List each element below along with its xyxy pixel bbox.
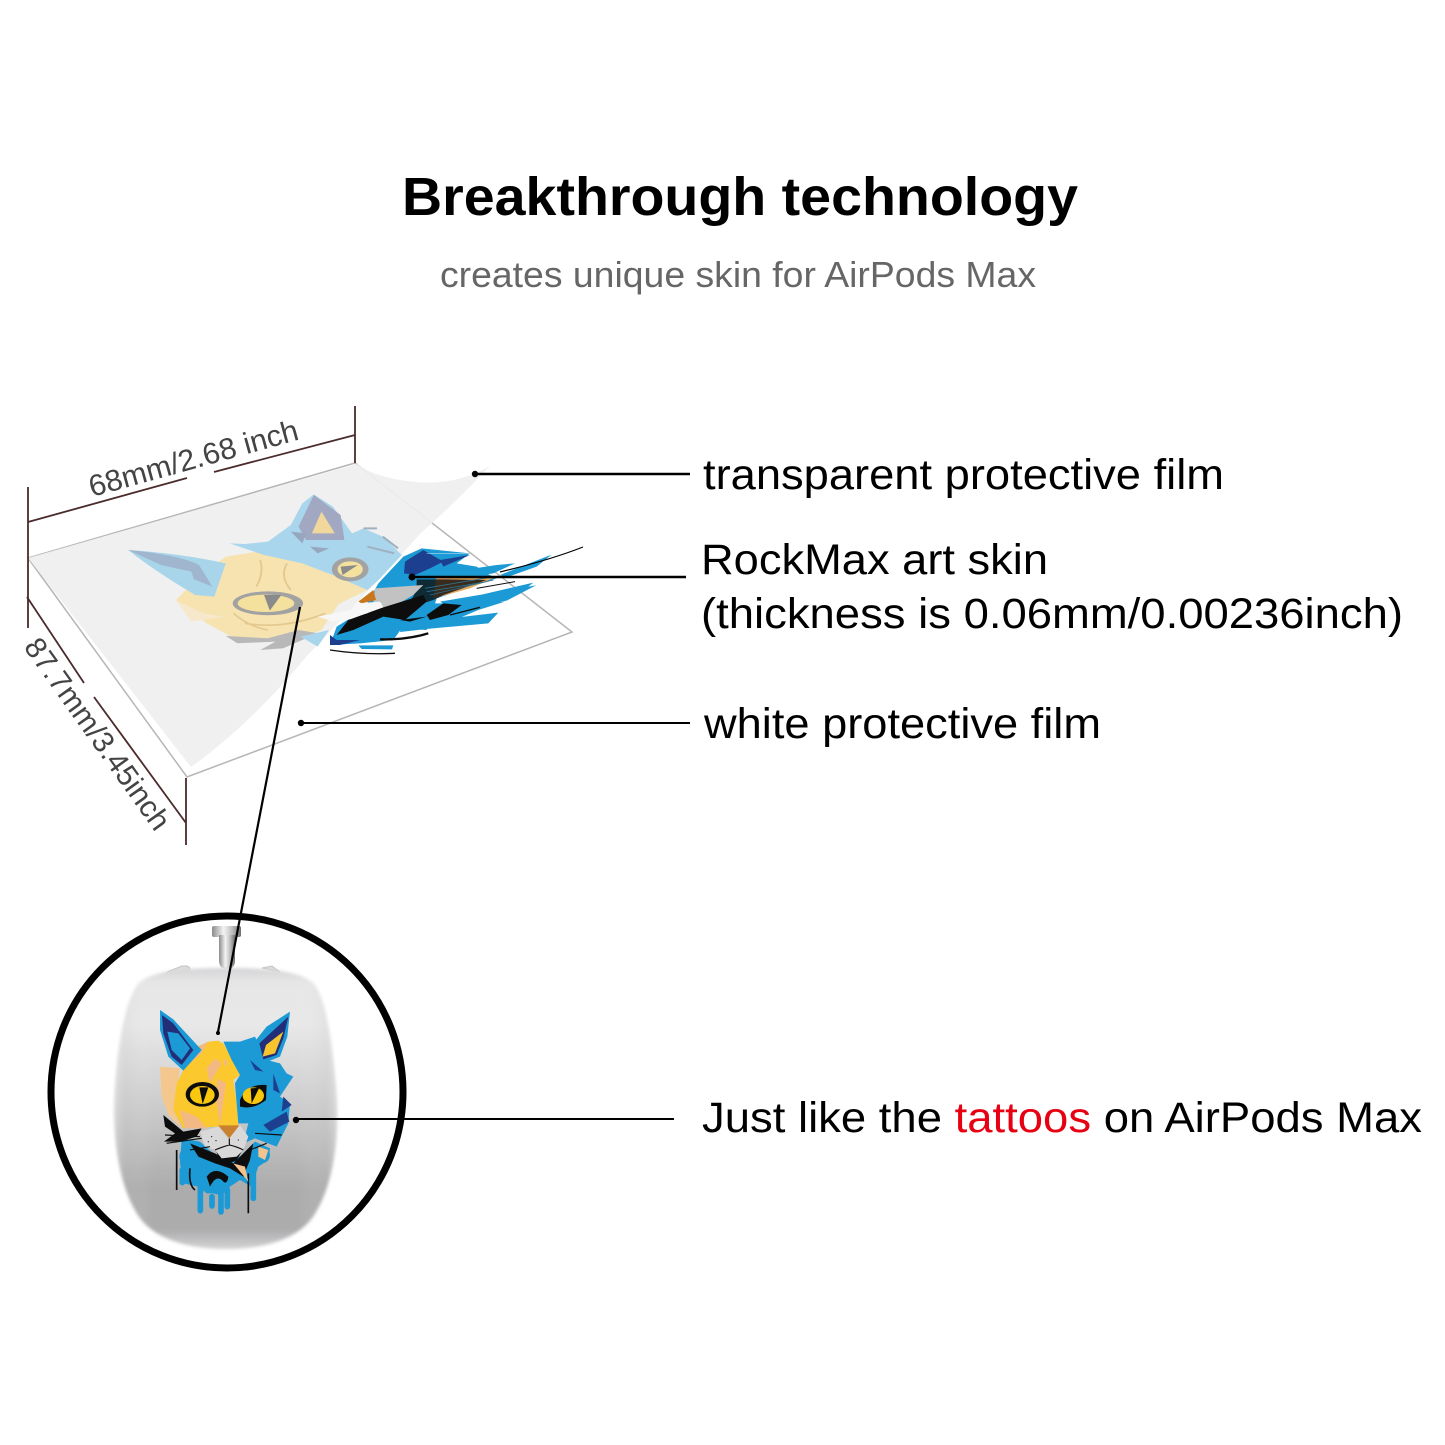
cat right eye xyxy=(240,1085,267,1107)
cat yellow half xyxy=(173,1041,240,1128)
callout label: transparent film: transparent protective film xyxy=(703,451,1224,499)
faded cat artwork under the film xyxy=(128,494,402,650)
callout line: art skin xyxy=(408,547,686,580)
subtitle: creates unique skin for AirPods Max xyxy=(440,254,1036,295)
cat left eye xyxy=(186,1082,219,1107)
dimension: height 87.7mm: 87.7mm/3.45inch xyxy=(17,632,177,837)
callout label: art skin xyxy=(701,536,1403,638)
dimension: width 68mm xyxy=(28,406,355,628)
callout label: art skin: (thickness is 0.06mm/0.00236inch) xyxy=(701,590,1403,638)
peeled colour artwork xyxy=(330,548,552,654)
diagram: layered skin sheet xyxy=(28,463,572,777)
cat peach fur xyxy=(160,1067,182,1128)
circle frame xyxy=(51,916,403,1268)
headphone earcup inset xyxy=(51,916,403,1268)
cat nose xyxy=(218,1125,239,1138)
callout label: white film: white protective film xyxy=(703,700,1101,748)
cat left ear xyxy=(160,1010,202,1071)
earcup buttons xyxy=(164,966,292,980)
white protective film sheet xyxy=(28,463,572,777)
callout line: skin to earcup xyxy=(216,607,300,1035)
cat right ear xyxy=(253,1012,290,1063)
cat mane and drips xyxy=(163,1115,270,1213)
dimension: width 68mm: 68mm/2.68 inch xyxy=(85,414,302,504)
cat dark blue fur xyxy=(250,1060,292,1132)
cat artwork on earcup xyxy=(160,1010,293,1213)
earcup body xyxy=(114,968,337,1249)
callout line: tattoo xyxy=(293,1117,674,1123)
title: Breakthrough technology xyxy=(402,167,1078,227)
callout line: white film xyxy=(298,720,690,726)
cat peach streaks xyxy=(180,1042,227,1128)
callout label: tattoo: Just like the tattoos on AirPods Max xyxy=(702,1094,1423,1142)
cat snout xyxy=(200,1125,248,1163)
transparent protective film xyxy=(28,464,490,767)
cat mouth and whiskers xyxy=(165,1133,282,1150)
callout line: transparent film xyxy=(472,471,690,477)
cat blue half xyxy=(223,1037,293,1147)
earcup stem xyxy=(212,926,241,969)
callout label: art skin: RockMax art skin xyxy=(701,536,1048,584)
